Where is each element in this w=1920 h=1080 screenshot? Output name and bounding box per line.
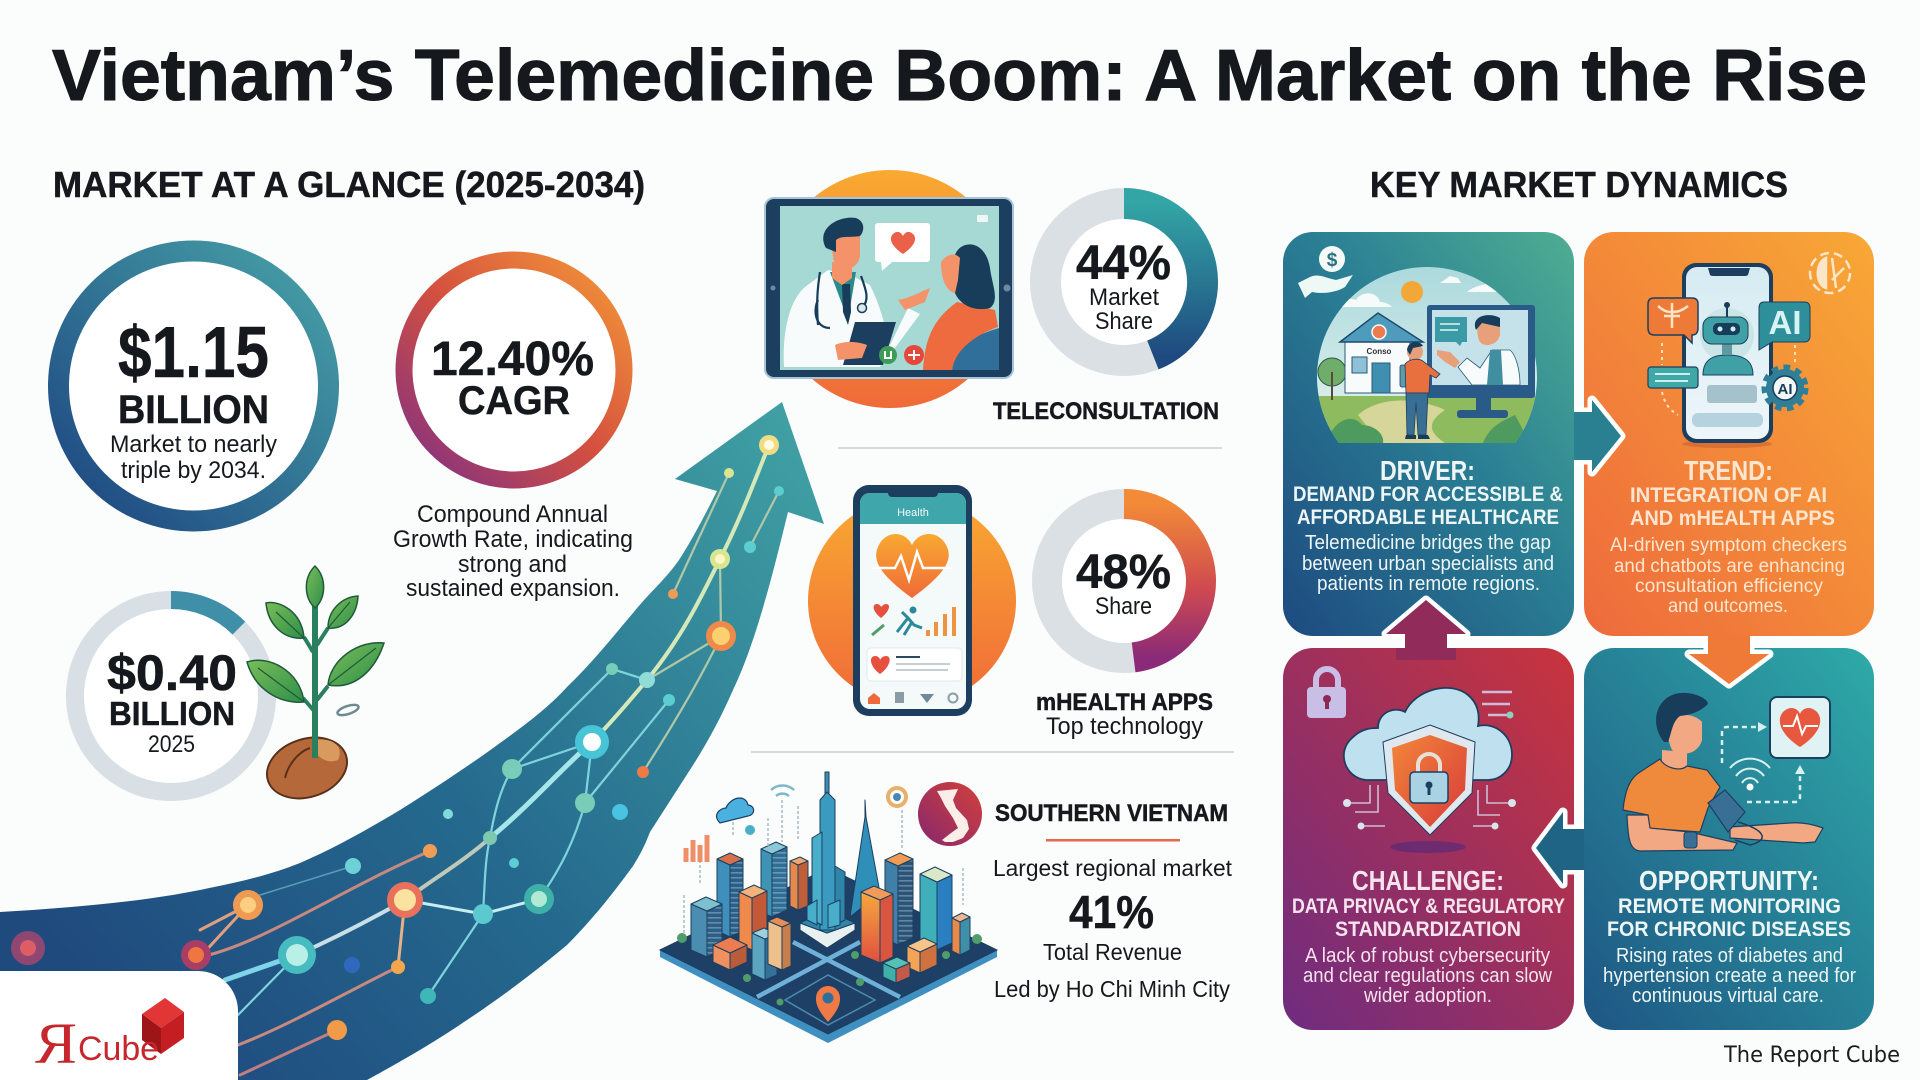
panel: challenge: and clear regulations can slow [1303, 965, 1553, 987]
panel: driver: between urban specialists and [1302, 553, 1554, 575]
panel: driver: Telemedicine bridges the gap [1305, 532, 1551, 554]
panel: trend: consultation efficiency [1635, 576, 1823, 597]
panel: opportunity: Rising rates of diabetes and [1616, 945, 1843, 967]
illustration: clinic and video doctor: Conso [1367, 347, 1392, 356]
panel: opportunity [1584, 648, 1874, 1030]
icon: padlock [1307, 669, 1346, 718]
panel: driver: AFFORDABLE HEALTHCARE [1297, 506, 1559, 529]
heading: market at a glance: MARKET AT A GLANCE (2025-2034) [53, 164, 645, 205]
cityscape buildings [691, 772, 970, 983]
logo card [0, 971, 238, 1080]
donut chart: 48% mHealth: 48% [1076, 546, 1171, 599]
text: Southern Vietnam stats: 41% [1069, 886, 1154, 938]
CAGR description [393, 501, 633, 602]
illustration: AI phone and chatbot [1648, 263, 1810, 448]
stat ring: 12.40% CAGR: CAGR [458, 379, 570, 423]
donut chart: 44% teleconsultation: 44% [1076, 237, 1171, 290]
growth arrow with network nodes [0, 402, 824, 1080]
CAGR description: sustained expansion. [406, 575, 620, 602]
label: mHealth apps: Top technology [1046, 713, 1203, 740]
title: Vietnam’s Telemedicine Boom: A Market on the Rise [52, 36, 1867, 116]
stat ring: $0.40 billion 2025: BILLION [109, 695, 235, 732]
panel: driver: DRIVER: [1380, 455, 1475, 486]
panel: trend: and outcomes. [1668, 596, 1788, 617]
stat ring: $1.15 billion: triple by 2034. [121, 457, 266, 484]
label: teleconsultation: TELECONSULTATION [993, 398, 1219, 425]
icon: mHealth phone: Health [897, 507, 929, 519]
stat ring: $1.15 billion: BILLION [118, 388, 269, 432]
text: Southern Vietnam stats: SOUTHERN VIETNAM [995, 800, 1228, 827]
stat ring: 12.40% CAGR [404, 260, 624, 480]
panel: trend: AND mHEALTH APPS [1630, 507, 1835, 530]
illustration: AI phone and chatbot: AI [1778, 381, 1792, 398]
panel: driver: DEMAND FOR ACCESSIBLE & [1293, 483, 1563, 506]
text: Southern Vietnam stats: Total Revenue [1043, 939, 1182, 965]
panel: trend [1584, 232, 1874, 636]
illustration: patient with blood pressure cuff [1623, 693, 1830, 851]
donut chart: 44% teleconsultation: Market [1089, 284, 1159, 311]
icon: seedling [247, 566, 384, 808]
icon: mHealth phone [808, 485, 1016, 716]
panel: trend: and chatbots are enhancing [1614, 556, 1845, 577]
icon: globe outline [1810, 253, 1850, 293]
stat ring: 12.40% CAGR: 12.40% [431, 333, 594, 386]
stat ring: $0.40 billion 2025: $0.40 [107, 645, 237, 701]
panel: challenge [1283, 648, 1574, 1030]
arrow: challenge to driver [1386, 600, 1466, 660]
illustration: clinic and video doctor [1317, 267, 1537, 443]
text: Southern Vietnam stats [993, 800, 1233, 1002]
panel: challenge: A lack of robust cybersecurity [1305, 945, 1550, 967]
label: mHealth apps [1036, 689, 1213, 740]
donut chart: 48% mHealth: Share [1095, 593, 1152, 620]
logo card: Cube [78, 1030, 159, 1068]
panel: challenge: CHALLENGE: [1352, 865, 1504, 896]
panel: opportunity: hypertension create a need for [1603, 965, 1856, 987]
panel: challenge: STANDARDIZATION [1335, 918, 1521, 941]
stat ring: $0.40 billion 2025: 2025 [148, 731, 195, 758]
icon: hand with dollar [1298, 246, 1353, 298]
stat ring: $0.40 billion 2025 [75, 600, 267, 792]
donut chart: 44% teleconsultation: Share [1095, 308, 1153, 335]
arrow: opportunity to challenge [1536, 812, 1590, 884]
illustration: isometric city [660, 772, 997, 1043]
stat ring: $1.15 billion: Market to nearly [110, 431, 277, 458]
CAGR description: strong and [458, 551, 567, 578]
illustration: AI phone and chatbot: AI [1768, 304, 1802, 341]
panel: challenge: wider adoption. [1363, 985, 1492, 1007]
badge: Vietnam map [918, 782, 982, 846]
donut chart: 48% mHealth [1047, 504, 1201, 658]
stat ring: $1.15 billion: $1.15 [118, 313, 269, 393]
arrow: trend to opportunity [1689, 630, 1769, 684]
panel: opportunity: FOR CHRONIC DISEASES [1607, 918, 1851, 941]
CAGR description: Compound Annual [417, 501, 608, 528]
arrow: driver to trend [1568, 400, 1621, 472]
logo card: Я [35, 1011, 77, 1076]
stat ring: $1.15 billion [58, 251, 328, 521]
text: Southern Vietnam stats: Largest regional market [993, 855, 1233, 881]
label: mHealth apps: mHEALTH APPS [1036, 689, 1213, 716]
panel: driver [1283, 232, 1574, 636]
panel: driver: patients in remote regions. [1317, 573, 1540, 595]
donut chart: 44% teleconsultation [1046, 204, 1203, 360]
panel: opportunity: REMOTE MONITORING [1618, 895, 1841, 918]
icon: hand with dollar: $ [1327, 250, 1338, 271]
icon: tablet teleconsultation [765, 170, 1013, 408]
text: Southern Vietnam stats: Led by Ho Chi Minh City [994, 976, 1230, 1002]
panel: challenge: DATA PRIVACY & REGULATORY [1292, 895, 1565, 918]
panel: opportunity: continuous virtual care. [1632, 985, 1824, 1007]
CAGR description: Growth Rate, indicating [393, 526, 633, 553]
source credit: The Report Cube [1723, 1043, 1900, 1068]
panel: trend: AI-driven symptom checkers [1610, 535, 1847, 556]
panel: trend: TREND: [1684, 455, 1773, 486]
panel: trend: INTEGRATION OF AI [1630, 484, 1827, 507]
illustration: cloud and shield [1343, 688, 1516, 853]
panel: opportunity: OPPORTUNITY: [1639, 865, 1819, 896]
heading: key market dynamics: KEY MARKET DYNAMICS [1370, 164, 1788, 205]
